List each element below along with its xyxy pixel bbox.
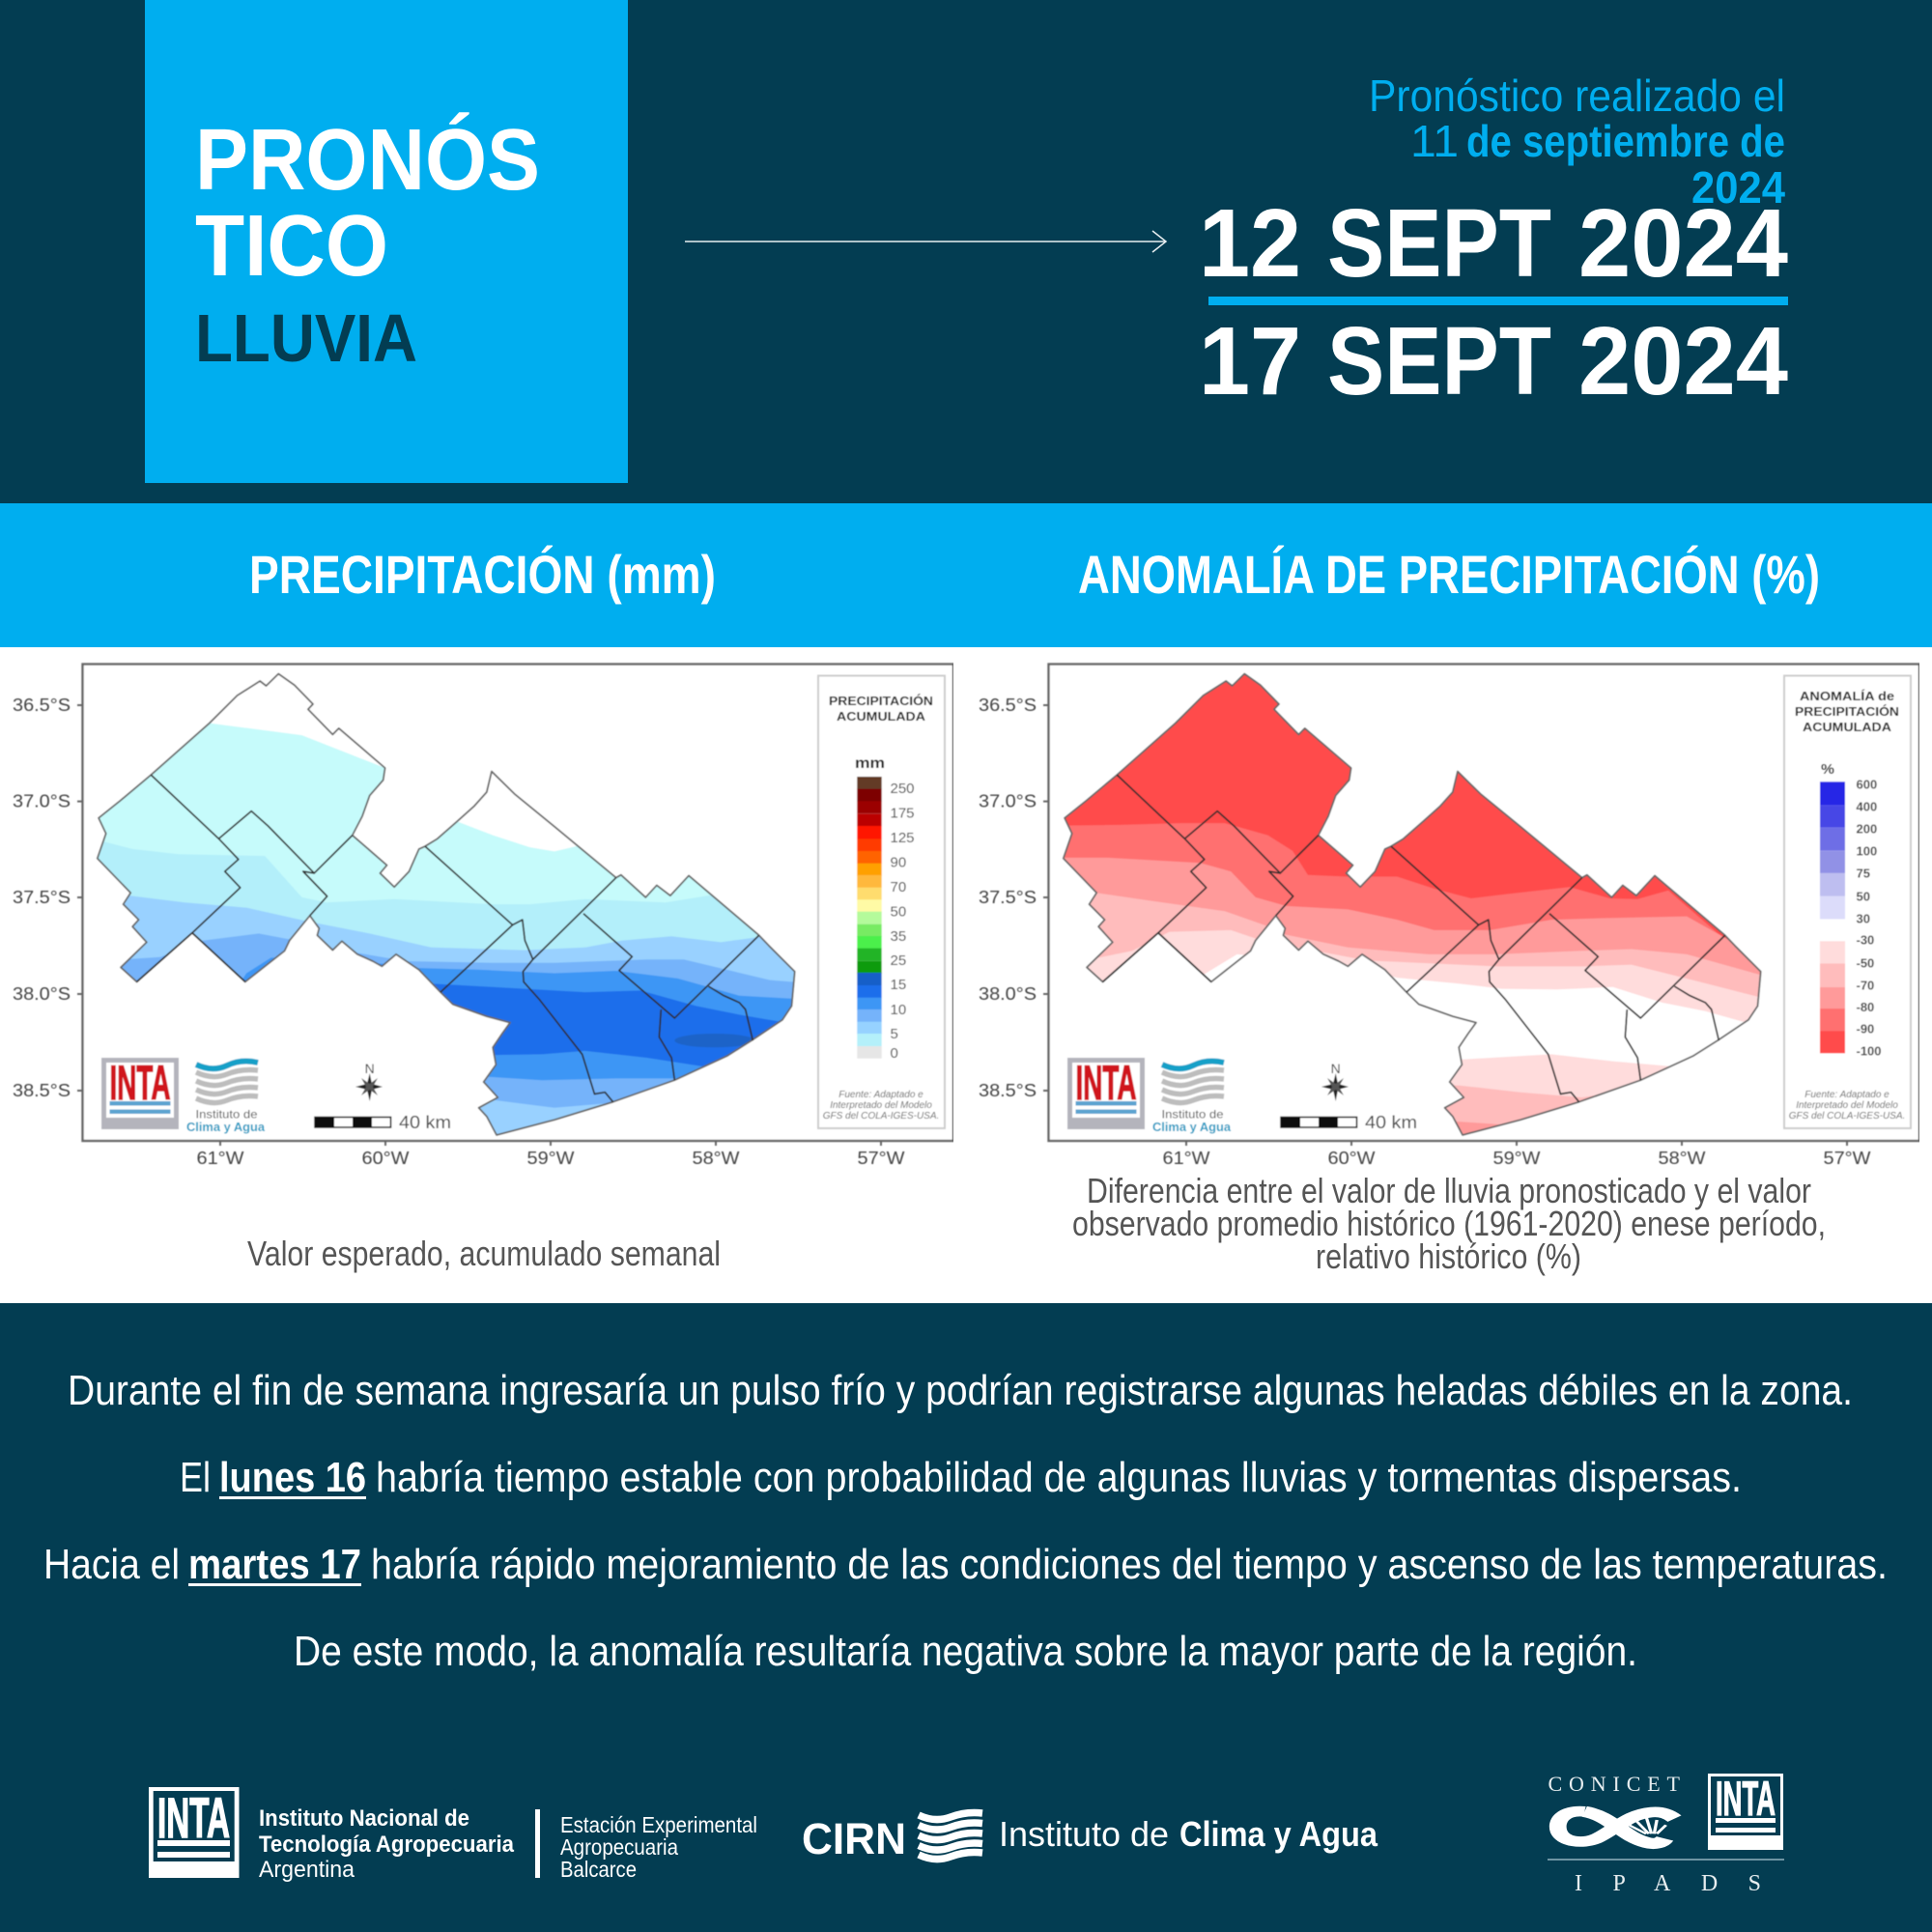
colour scale	[857, 777, 882, 1059]
icon: infinity	[1558, 1811, 1674, 1843]
title: pronóstico	[195, 111, 540, 295]
footer text: Instituto de Clima y Agua	[999, 1814, 1378, 1854]
latitude and longitude axes: 38.5°S	[13, 1081, 71, 1100]
Instituto de Clima y Agua logo: Clima y Agua	[1152, 1120, 1232, 1134]
footer divider	[535, 1809, 540, 1878]
legend: precipitación acumulada: 250	[891, 781, 915, 797]
legend: anomalía de precipitación acumulada: 30	[1857, 912, 1870, 925]
scale bar	[315, 1113, 451, 1132]
start date	[1199, 189, 1788, 298]
latitude and longitude axes: 57°W	[858, 1149, 905, 1168]
footer text: Estación Experimental	[560, 1812, 757, 1882]
INTA logo: INTA	[110, 1056, 170, 1110]
legend: anomalía de precipitación acumulada	[1784, 676, 1911, 1128]
legend: precipitación acumulada: 25	[891, 952, 906, 969]
latitude and longitude axes: 58°W	[692, 1149, 740, 1168]
Instituto de Clima y Agua logo: Instituto de	[195, 1107, 258, 1121]
latitude and longitude axes: 61°W	[197, 1149, 244, 1168]
legend: precipitación acumulada: 15	[891, 977, 906, 993]
forecast issue date: 11	[1410, 116, 1459, 166]
legend: precipitación acumulada: PRECIPITACIÓN	[829, 694, 933, 708]
line: martes 17: Hacia el	[43, 1541, 180, 1588]
line: martes 17: martes 17	[188, 1541, 361, 1588]
forecast issue date	[1369, 71, 1785, 213]
legend: anomalía de precipitación acumulada: GFS del COLA-IGES-USA.	[1789, 1111, 1905, 1122]
forecast description text	[43, 1367, 1888, 1675]
footer text: Estación Experimental: Balcarce	[560, 1857, 637, 1882]
legend: precipitación acumulada: 70	[891, 879, 906, 895]
legend: precipitación acumulada: 5	[891, 1026, 898, 1042]
latitude and longitude axes	[979, 696, 1871, 1168]
legend: anomalía de precipitación acumulada: -50	[1857, 956, 1874, 970]
panel: precipitation map	[13, 647, 953, 1168]
section heading band	[0, 503, 1932, 647]
latitude and longitude axes: 37.0°S	[13, 792, 71, 811]
end date: SEPT	[1327, 307, 1551, 415]
legend: precipitación acumulada: ACUMULADA	[837, 709, 926, 724]
end date: 17	[1199, 307, 1301, 415]
legend: anomalía de precipitación acumulada: ACUMULADA	[1803, 720, 1892, 734]
line: lunes 16: habría tiempo estable con probabilidad de algunas lluvias y tormentas dispersas.	[376, 1454, 1742, 1501]
footer text: Instituto Nacional de Tecnología Agropecuaria: Argentina	[259, 1857, 355, 1883]
end date: 2024	[1578, 307, 1788, 415]
compass	[355, 1061, 383, 1101]
legend: anomalía de precipitación acumulada: 400	[1857, 800, 1877, 813]
panel: anomaly map	[979, 647, 1919, 1168]
legend: precipitación acumulada: 175	[891, 806, 915, 821]
legend: precipitación acumulada: 35	[891, 928, 906, 945]
footer logo: INTA: INTA	[157, 1787, 230, 1850]
latitude and longitude axes: 38.0°S	[13, 984, 71, 1004]
legend: precipitación acumulada: 10	[891, 1002, 906, 1018]
legend: precipitación acumulada: GFS del COLA-IGES-USA.	[823, 1111, 939, 1122]
end date	[1199, 307, 1788, 415]
caption: anomaly: relativo histórico (%)	[1316, 1236, 1581, 1276]
footer logo: CONICET IPADS: IPADS	[1575, 1871, 1761, 1896]
latitude and longitude axes: 61°W	[1163, 1149, 1210, 1168]
Instituto de Clima y Agua logo: Instituto de	[1161, 1107, 1224, 1121]
legend: precipitación acumulada: 125	[891, 830, 915, 846]
latitude and longitude axes: 59°W	[1493, 1149, 1541, 1168]
forecast issue date: 2024	[1691, 162, 1785, 213]
forecast issue date: de septiembre de	[1466, 116, 1785, 166]
subtitle: lluvia: LLUVIA	[195, 300, 417, 376]
footer text: Instituto Nacional de Tecnología Agropecuaria: Tecnología Agropecuaria	[259, 1832, 515, 1858]
latitude and longitude axes	[13, 696, 905, 1168]
footer logo: CONICET IPADS: CONICET	[1548, 1772, 1681, 1796]
footer text: Estación Experimental: Estación Experimental	[560, 1812, 757, 1837]
legend: anomalía de precipitación acumulada: 200	[1857, 821, 1877, 837]
legend: anomalía de precipitación acumulada: -100	[1857, 1043, 1882, 1059]
footer logo: CIRN	[802, 1812, 982, 1863]
legend: anomalía de precipitación acumulada: PRECIPITACIÓN	[1795, 704, 1899, 719]
legend: anomalía de precipitación acumulada: Fuente: Adaptado e	[1804, 1090, 1889, 1100]
latitude and longitude axes: 36.5°S	[13, 696, 71, 715]
legend: anomalía de precipitación acumulada: 50	[1857, 889, 1870, 904]
footer text: Instituto Nacional de Tecnología Agropecuaria: Instituto Nacional de	[259, 1805, 469, 1832]
legend: anomalía de precipitación acumulada: -70	[1857, 978, 1874, 993]
Instituto de Clima y Agua logo	[186, 1062, 266, 1134]
legend: precipitación acumulada: mm	[855, 755, 885, 772]
white map panel	[0, 647, 1932, 1303]
line: lunes 16: El	[180, 1454, 211, 1501]
INTA logo	[1067, 1056, 1145, 1129]
latitude and longitude axes: 58°W	[1658, 1149, 1706, 1168]
map frame	[83, 665, 953, 1141]
footer text: Instituto Nacional de Tecnología Agropecuaria	[259, 1805, 515, 1883]
anomaly bands	[1062, 672, 1762, 1136]
legend: precipitación acumulada	[818, 676, 945, 1128]
latitude and longitude axes: 38.5°S	[979, 1081, 1037, 1100]
footer logo: CIRN: CIRN	[802, 1814, 906, 1863]
compass	[1321, 1061, 1349, 1101]
precipitation bands	[96, 672, 796, 1136]
scale bar: 40 km	[399, 1113, 451, 1132]
scale bar: 40 km	[1365, 1113, 1417, 1132]
scale bar	[1281, 1113, 1417, 1132]
map frame	[1049, 665, 1919, 1141]
compass: N	[365, 1061, 375, 1076]
caption: precipitation: Valor esperado, acumulado semanal	[247, 1234, 721, 1273]
latitude and longitude axes: 37.0°S	[979, 792, 1037, 811]
INTA logo	[101, 1056, 179, 1129]
legend: precipitación acumulada: 90	[891, 854, 906, 871]
title: pronóstico: TICO	[195, 198, 388, 295]
legend: anomalía de precipitación acumulada: %	[1821, 761, 1834, 778]
latitude and longitude axes: 37.5°S	[979, 888, 1037, 907]
legend: precipitación acumulada: Interpretado del Modelo	[830, 1100, 932, 1111]
caption: anomaly	[1072, 1171, 1826, 1276]
arrow	[685, 231, 1166, 252]
icon: INTA small	[1708, 1772, 1783, 1850]
date range	[1199, 189, 1788, 415]
start date: SEPT	[1327, 189, 1551, 298]
start date: 2024	[1578, 189, 1788, 298]
legend: anomalía de precipitación acumulada: -30	[1857, 933, 1874, 947]
INTA logo: INTA	[1076, 1056, 1136, 1110]
latitude and longitude axes: 60°W	[1327, 1149, 1376, 1168]
footer logo: INTA	[149, 1787, 240, 1878]
footer text: Instituto de Clima y Agua: Instituto de	[999, 1814, 1169, 1854]
latitude and longitude axes: 57°W	[1824, 1149, 1871, 1168]
footer text: Instituto de Clima y Agua: Clima y Agua	[1179, 1814, 1378, 1854]
legend: anomalía de precipitación acumulada: 100	[1857, 844, 1877, 858]
line: lunes 16: lunes 16	[219, 1454, 366, 1501]
legend: anomalía de precipitación acumulada: Interpretado del Modelo	[1796, 1100, 1898, 1111]
legend: precipitación acumulada: 0	[891, 1045, 898, 1062]
compass: N	[1331, 1061, 1341, 1076]
start date: 12	[1199, 189, 1301, 298]
latitude and longitude axes: 38.0°S	[979, 984, 1037, 1004]
latitude and longitude axes: 37.5°S	[13, 888, 71, 907]
legend: precipitación acumulada: Fuente: Adaptado e	[838, 1090, 923, 1100]
icon: INTA small: INTA	[1716, 1772, 1776, 1826]
caption: anomaly: Diferencia entre el valor de lluvia pronosticado y el valor	[1087, 1171, 1811, 1210]
heading: precipitación: PRECIPITACIÓN (mm)	[249, 544, 716, 605]
footer logo: CONICET IPADS	[1548, 1772, 1784, 1896]
legend: precipitación acumulada: 50	[891, 904, 906, 920]
Instituto de Clima y Agua logo	[1152, 1062, 1232, 1134]
latitude and longitude axes: 60°W	[361, 1149, 410, 1168]
legend: anomalía de precipitación acumulada: ANOMALÍA de	[1800, 689, 1894, 703]
header title box	[145, 0, 628, 483]
legend: anomalía de precipitación acumulada: 75	[1857, 866, 1870, 881]
latitude and longitude axes: 36.5°S	[979, 696, 1037, 715]
forecast issue date: Pronóstico realizado el	[1369, 71, 1785, 121]
colour scale	[1820, 781, 1845, 1053]
footer text: Estación Experimental: Agropecuaria	[560, 1834, 678, 1860]
legend: anomalía de precipitación acumulada: 600	[1857, 777, 1877, 792]
line: conclusion: De este modo, la anomalía resultaría negativa sobre la mayor parte de la región.	[294, 1628, 1637, 1675]
latitude and longitude axes: 59°W	[527, 1149, 575, 1168]
Instituto de Clima y Agua logo: Clima y Agua	[186, 1120, 266, 1134]
title: pronóstico: PRONÓS	[195, 111, 540, 209]
legend: anomalía de precipitación acumulada: -80	[1857, 1000, 1874, 1014]
legend: anomalía de precipitación acumulada: -90	[1857, 1022, 1874, 1036]
